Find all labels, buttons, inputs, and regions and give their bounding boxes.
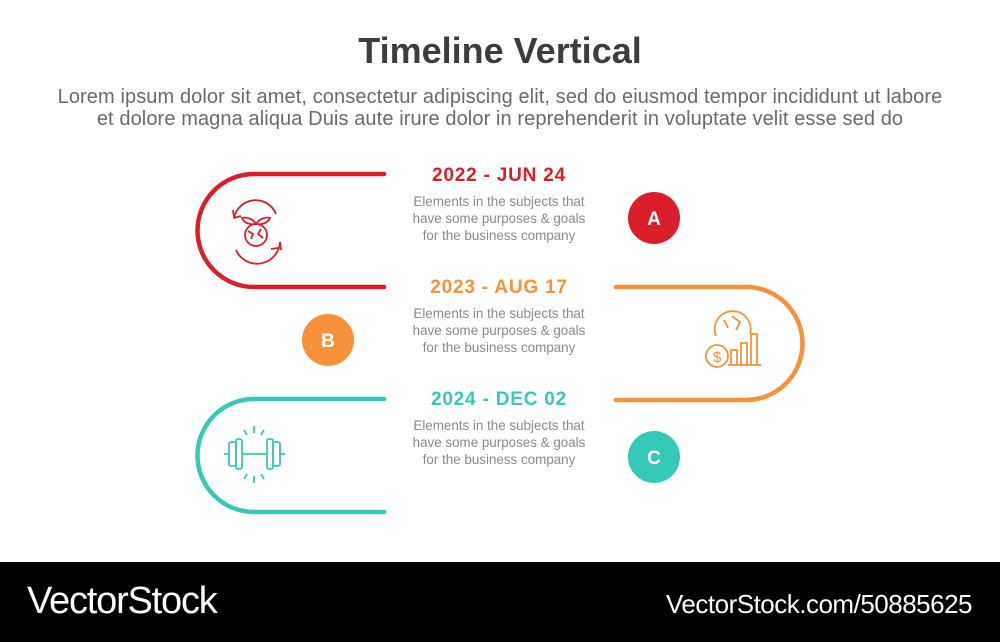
step A bracket xyxy=(198,174,384,287)
text block A: have some purposes & goals xyxy=(413,211,586,226)
text block B: 2023 - AUG 17 xyxy=(430,277,568,298)
subtitle: et dolore magna aliqua Duis aute irure dolor in reprehenderit in voluptate velit esse sed do xyxy=(97,108,903,130)
text block A xyxy=(413,165,586,243)
text block C: 2024 - DEC 02 xyxy=(431,389,567,410)
badge A: A xyxy=(647,209,661,230)
text block C: for the business company xyxy=(423,452,576,467)
icon: globe plant recycle xyxy=(233,200,281,264)
footer logo: VectorStock xyxy=(27,580,217,622)
title: Timeline Vertical xyxy=(358,30,642,71)
step C bracket xyxy=(198,399,384,512)
badge A xyxy=(628,192,680,244)
icon: globe money chart: $ xyxy=(713,349,722,366)
text block B: Elements in the subjects that xyxy=(413,306,585,321)
badge B: B xyxy=(321,331,335,352)
text block B: for the business company xyxy=(423,340,576,355)
text block C xyxy=(413,389,586,467)
subtitle xyxy=(58,86,942,130)
footer url: VectorStock.com/50885625 xyxy=(666,589,972,619)
icon: dumbbell xyxy=(224,426,285,483)
badge C xyxy=(628,431,680,483)
text block C: Elements in the subjects that xyxy=(413,418,585,433)
text block A: for the business company xyxy=(423,228,576,243)
icon: globe money chart xyxy=(706,311,761,367)
text block A: Elements in the subjects that xyxy=(413,194,585,209)
text block B xyxy=(413,277,586,355)
subtitle: Lorem ipsum dolor sit amet, consectetur adipiscing elit, sed do eiusmod tempor incididunt ut labore xyxy=(58,86,942,108)
badge B xyxy=(302,314,354,366)
badge C: C xyxy=(647,448,661,469)
footer bar xyxy=(0,562,1000,642)
text block B: have some purposes & goals xyxy=(413,323,586,338)
text block C: have some purposes & goals xyxy=(413,435,586,450)
text block A: 2022 - JUN 24 xyxy=(432,165,566,186)
step B bracket xyxy=(616,287,802,400)
